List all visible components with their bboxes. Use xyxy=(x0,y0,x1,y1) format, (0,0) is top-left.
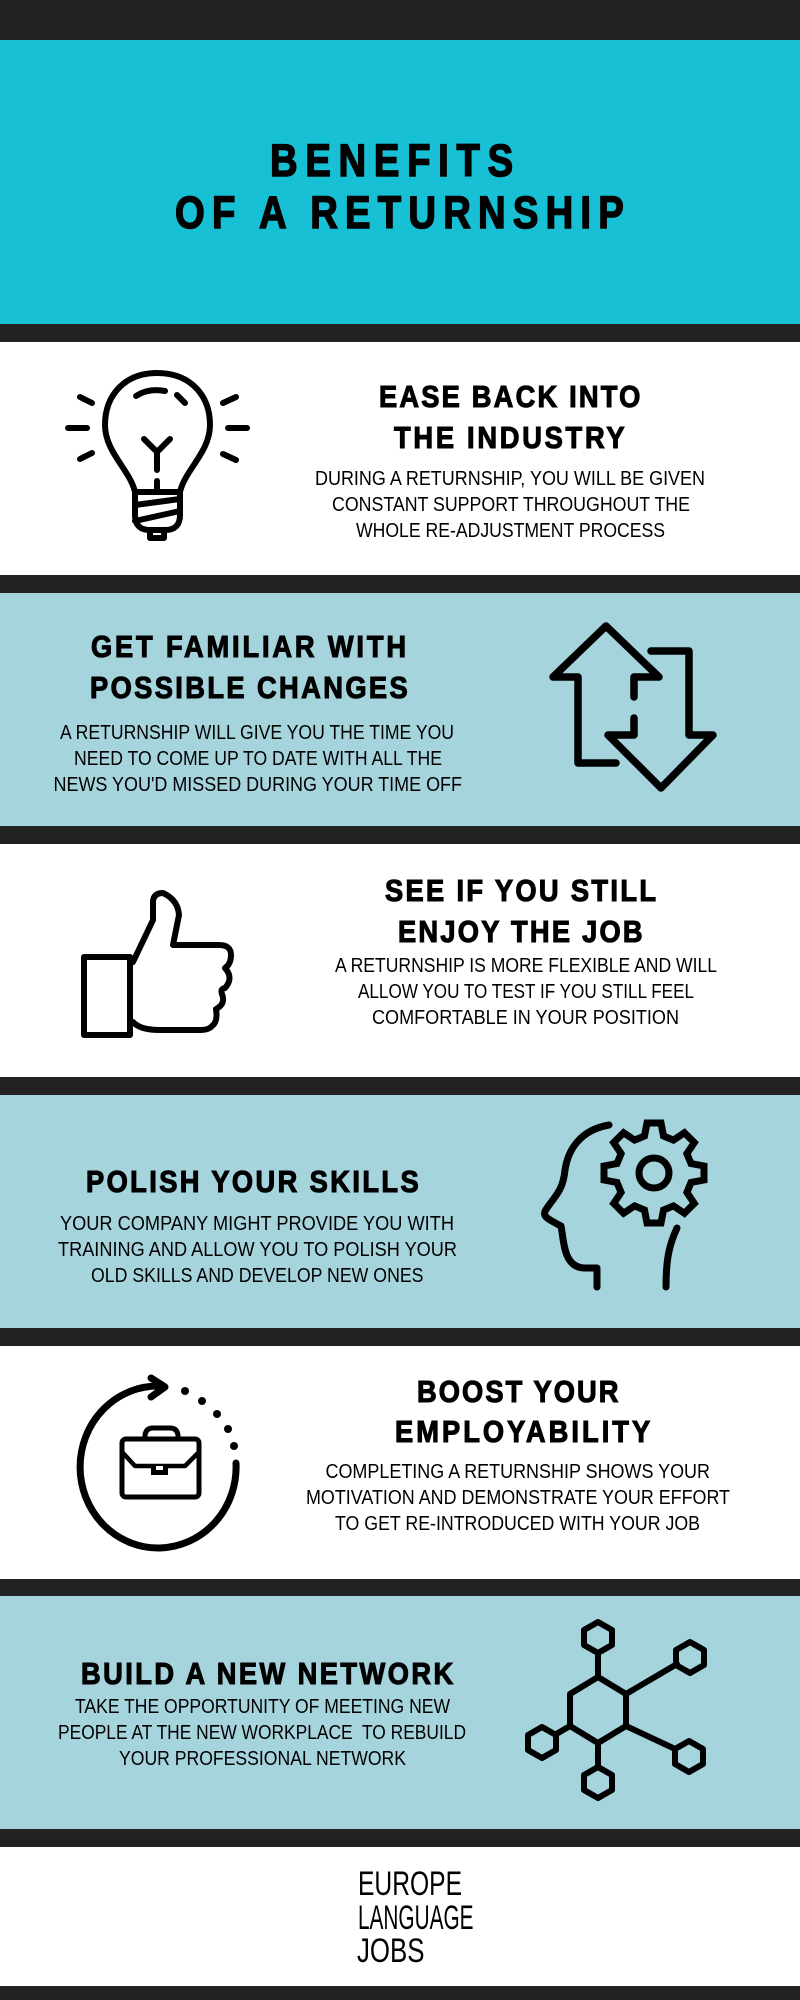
text block: polish description: OLD SKILLS AND DEVELOP NEW ONES xyxy=(91,1265,424,1287)
heading: see if you still: ENJOY THE JOB xyxy=(398,915,643,949)
text block: network description: TAKE THE OPPORTUNITY OF MEETING NEW xyxy=(75,1696,450,1718)
text block: polish description: YOUR COMPANY MIGHT PROVIDE YOU WITH xyxy=(60,1213,454,1235)
logo: Europe Language Jobs: EUROPE xyxy=(358,1865,462,1903)
text block: ease back description: DURING A RETURNSHIP, YOU WILL BE GIVEN xyxy=(315,468,705,490)
text block: polish description xyxy=(58,1213,457,1287)
text block: get familiar description: NEED TO COME UP TO DATE WITH ALL THE xyxy=(74,748,442,770)
text block: see if you still description: A RETURNSHIP IS MORE FLEXIBLE AND WILL xyxy=(335,955,717,977)
panel: build a new network xyxy=(0,1596,800,1829)
icon: head with gear xyxy=(545,1123,704,1287)
text block: boost description: TO GET RE-INTRODUCED WITH YOUR JOB xyxy=(335,1513,700,1535)
text block: polish description: TRAINING AND ALLOW YOU TO POLISH YOUR xyxy=(58,1239,457,1261)
text block: boost description: MOTIVATION AND DEMONSTRATE YOUR EFFORT xyxy=(306,1487,730,1509)
panel: footer logo xyxy=(0,1847,800,1986)
text block: see if you still description: ALLOW YOU TO TEST IF YOU STILL FEEL xyxy=(358,981,694,1003)
panel: title banner xyxy=(0,40,800,324)
heading: polish your skills: POLISH YOUR SKILLS xyxy=(86,1165,419,1199)
title xyxy=(175,135,624,238)
text block: boost description xyxy=(306,1461,730,1535)
logo: Europe Language Jobs: LANGUAGE xyxy=(358,1899,474,1937)
icon: light bulb xyxy=(68,373,247,538)
text block: get familiar description: NEWS YOU'D MISSED DURING YOUR TIME OFF xyxy=(54,774,462,796)
heading: boost your employability xyxy=(395,1375,650,1449)
heading: ease back into the industry xyxy=(379,380,640,455)
heading: see if you still xyxy=(385,874,656,949)
heading: ease back into the industry: EASE BACK INTO xyxy=(379,380,640,414)
heading: build a new network: BUILD A NEW NETWORK xyxy=(81,1657,453,1691)
heading: get familiar: POSSIBLE CHANGES xyxy=(90,671,408,705)
icon: briefcase in circular arrow xyxy=(80,1378,238,1548)
text block: network description: YOUR PROFESSIONAL NETWORK xyxy=(119,1748,407,1770)
text block: see if you still description xyxy=(335,955,717,1029)
heading: get familiar xyxy=(90,630,408,705)
heading: see if you still: SEE IF YOU STILL xyxy=(385,874,656,908)
text block: ease back description: WHOLE RE-ADJUSTMENT PROCESS xyxy=(356,520,665,542)
text block: network description xyxy=(58,1696,466,1770)
panel: boost your employability xyxy=(0,1346,800,1579)
icon: thumbs up xyxy=(84,893,231,1035)
text block: see if you still description: COMFORTABLE IN YOUR POSITION xyxy=(372,1007,679,1029)
panel: polish your skills xyxy=(0,1095,800,1328)
heading: boost your employability: EMPLOYABILITY xyxy=(395,1415,650,1449)
icon: network of hexagons xyxy=(528,1622,704,1798)
heading: boost your employability: BOOST YOUR xyxy=(417,1375,619,1409)
text block: boost description: COMPLETING A RETURNSHIP SHOWS YOUR xyxy=(326,1461,710,1483)
text block: network description: PEOPLE AT THE NEW WORKPLACE TO REBUILD xyxy=(58,1722,466,1744)
title: BENEFITS xyxy=(270,135,513,186)
logo: Europe Language Jobs xyxy=(357,1865,474,1970)
text block: get familiar description: A RETURNSHIP WILL GIVE YOU THE TIME YOU xyxy=(60,722,454,744)
panel: see if you still enjoy the job xyxy=(0,844,800,1077)
text block: get familiar description xyxy=(54,722,462,796)
panel: get familiar with possible changes xyxy=(0,593,800,826)
heading: get familiar: GET FAMILIAR WITH xyxy=(91,630,406,664)
text block: ease back description: CONSTANT SUPPORT THROUGHOUT THE xyxy=(332,494,690,516)
panel: ease back into the industry xyxy=(0,342,800,575)
text block: ease back description xyxy=(315,468,705,542)
title: OF A RETURNSHIP xyxy=(175,187,624,238)
icon: up and down arrows xyxy=(553,626,713,788)
heading: ease back into the industry: THE INDUSTRY xyxy=(394,421,625,455)
logo: Europe Language Jobs: JOBS xyxy=(357,1932,424,1970)
